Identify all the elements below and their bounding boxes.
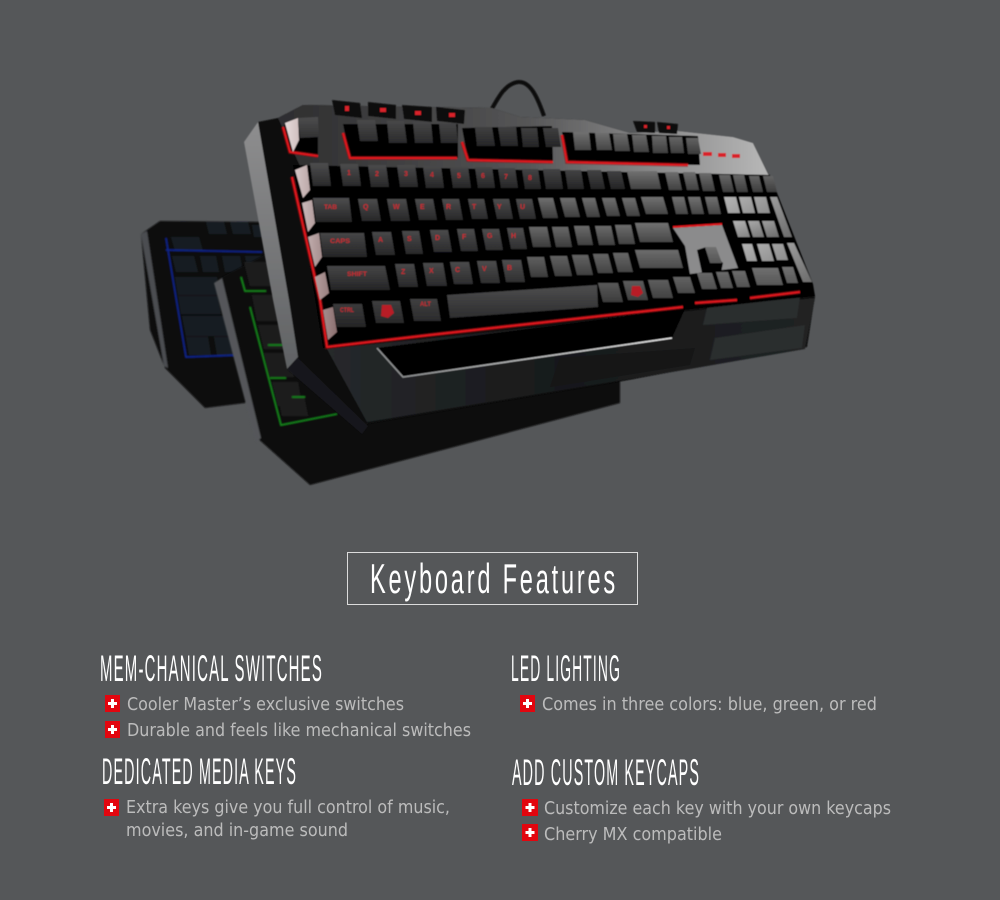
feature: Mem-chanical switches: Cooler Master’s exclusive switches xyxy=(127,695,404,715)
green keyboard xyxy=(214,250,620,485)
USB cable xyxy=(489,82,544,116)
palm rest recess xyxy=(377,309,685,377)
heading box: Keyboard Features: Keyboard Features xyxy=(370,555,618,602)
key legends: CTRL xyxy=(340,308,354,314)
feature: Mem-chanical switches: Durable and feels like mechanical switches xyxy=(127,721,471,741)
keyboard body xyxy=(258,105,815,424)
key legends: 2 xyxy=(375,171,379,178)
key legends: TAB xyxy=(324,205,338,211)
key legends: G xyxy=(487,233,493,240)
key legends: V xyxy=(482,266,487,273)
function row keys xyxy=(298,117,561,147)
feature: LED lighting: LED LIGHTING xyxy=(511,648,621,689)
key legends: X xyxy=(429,268,434,275)
key legends: 1 xyxy=(347,170,351,177)
key legends: SHIFT xyxy=(347,272,367,278)
plate recess above arrow keys xyxy=(673,225,738,274)
key legends: ALT xyxy=(420,302,431,308)
icon: red plus bullet xyxy=(522,799,538,816)
key bed xyxy=(293,165,815,348)
feature: Add custom keycaps: Customize each key with your own keycaps xyxy=(544,799,891,819)
key legends: 6 xyxy=(481,173,485,180)
number row keys xyxy=(310,163,625,189)
feature: Dedicated media keys: movies, and in-game sound xyxy=(126,821,348,841)
feature: Dedicated media keys: DEDICATED MEDIA KEYS xyxy=(102,751,297,792)
key legends: B xyxy=(507,265,512,272)
top metal plate xyxy=(278,105,771,180)
key legends: C xyxy=(455,267,460,274)
key legends: 5 xyxy=(457,173,461,180)
icon: red plus bullet xyxy=(520,695,535,712)
red keyboard xyxy=(244,82,815,434)
feature: LED lighting: Comes in three colors: blue, green, or red xyxy=(542,695,877,715)
icon: red plus bullet xyxy=(522,824,538,841)
key legends: Q xyxy=(363,204,369,211)
shift row keys xyxy=(327,260,525,290)
QWERTY row keys xyxy=(313,198,536,222)
feature: Add custom keycaps: ADD CUSTOM KEYCAPS xyxy=(512,752,700,793)
palm and side panels xyxy=(703,297,805,360)
icon: red plus bullet xyxy=(105,695,120,712)
palm rest xyxy=(327,298,815,422)
red LED outlines xyxy=(283,127,800,347)
icon: red plus bullet xyxy=(104,799,119,816)
key legends: CAPS xyxy=(330,239,350,245)
backlit key logos xyxy=(381,286,643,318)
bottom row keys xyxy=(333,285,598,327)
feature: LED lighting xyxy=(511,648,877,715)
feature: Dedicated media keys: Extra keys give you full control of music, xyxy=(126,798,450,818)
key legends: D xyxy=(435,235,440,242)
key legends: U xyxy=(520,204,525,211)
key legends xyxy=(324,170,532,314)
key legends: 7 xyxy=(504,174,508,181)
key legends: Y xyxy=(497,204,502,211)
key legends: A xyxy=(378,237,383,244)
key legends: R xyxy=(446,204,451,211)
blue keyboard xyxy=(141,221,270,408)
key legends: 3 xyxy=(404,171,408,178)
feature: Add custom keycaps xyxy=(512,752,891,845)
left silver bezel xyxy=(244,122,298,369)
key legends: W xyxy=(393,204,400,211)
icon: red plus bullet xyxy=(105,721,120,738)
key legends: H xyxy=(511,233,516,240)
feature: Add custom keycaps: Cherry MX compatible xyxy=(544,825,722,845)
key legends: T xyxy=(472,204,477,211)
red LED glow xyxy=(283,127,800,347)
heading box: Keyboard Features xyxy=(348,552,638,604)
key legends: 4 xyxy=(430,172,434,179)
feature: Mem-chanical switches: MEM-CHANICAL SWITCHES xyxy=(100,648,323,689)
media keys xyxy=(332,100,678,134)
key legends: F xyxy=(462,234,467,241)
key legends: Z xyxy=(401,269,406,276)
status LEDs xyxy=(703,152,740,158)
ASDF row keys xyxy=(320,228,527,257)
feature: Dedicated media keys xyxy=(102,751,450,841)
key legends: S xyxy=(407,236,412,243)
key legends: E xyxy=(420,204,425,211)
keyboard product image xyxy=(141,82,815,485)
left key side highlights xyxy=(285,118,337,340)
feature: Mem-chanical switches xyxy=(100,648,471,741)
key legends: 8 xyxy=(528,175,532,182)
